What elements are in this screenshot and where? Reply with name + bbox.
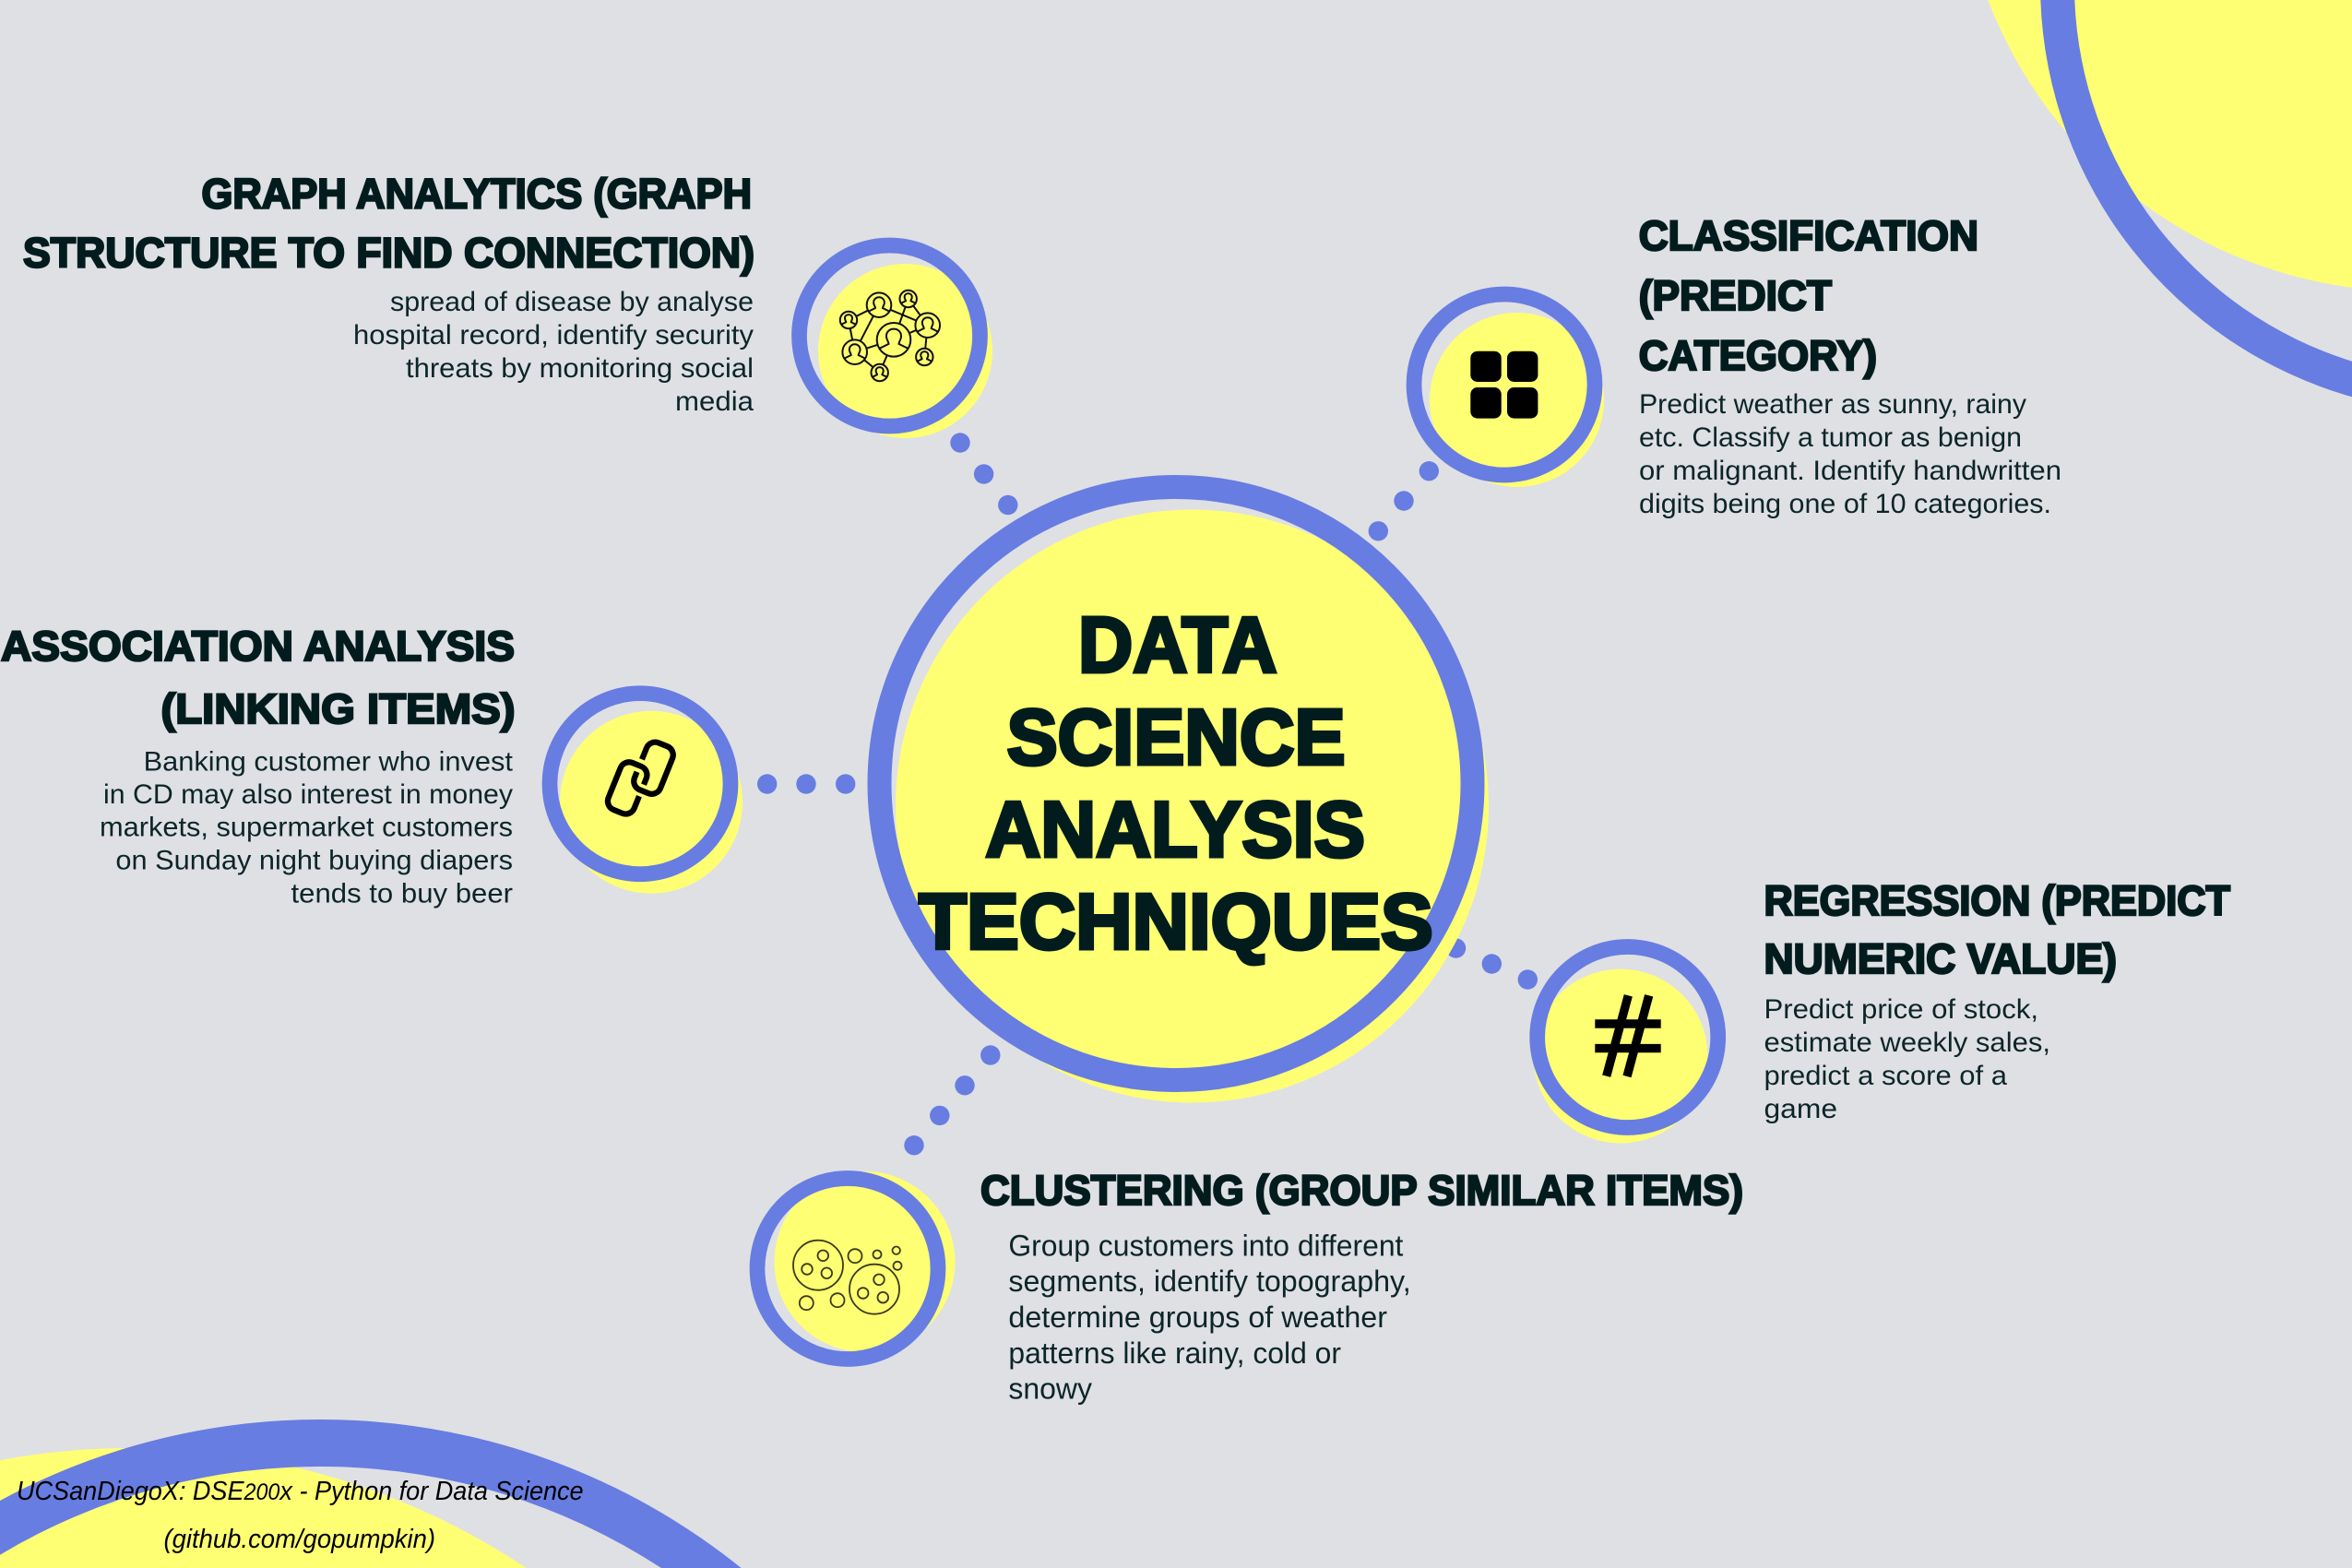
footer credit: (github.com/gopumpkin) bbox=[164, 1525, 435, 1554]
text: graph analytics description: media bbox=[675, 386, 754, 417]
heading: classification: CLASSIFICATION bbox=[1639, 212, 1978, 259]
text: association analysis description: tends to buy beer bbox=[291, 878, 513, 909]
heading: regression: NUMERIC VALUE) bbox=[1764, 935, 2117, 982]
node: regression bbox=[1534, 946, 1718, 1143]
connector dots: clustering bbox=[904, 1045, 1001, 1155]
text: association analysis description: Banking customer who invest bbox=[144, 747, 514, 778]
node: association analysis bbox=[550, 694, 742, 894]
heading: association analysis bbox=[1, 623, 515, 732]
text: regression description: Predict price of stock, bbox=[1764, 994, 2038, 1025]
connector dots: regression bbox=[1446, 938, 1538, 990]
heading: graph analytics bbox=[23, 170, 754, 277]
heading: graph analytics: GRAPH ANALYTICS (GRAPH bbox=[201, 170, 752, 218]
connector dots: association analysis bbox=[757, 774, 855, 794]
node: clustering bbox=[757, 1171, 956, 1360]
heading: association analysis: ASSOCIATION ANALYSIS bbox=[1, 623, 515, 670]
text: classification description: or malignant. Identify handwritten bbox=[1639, 456, 2061, 486]
text: regression description: game bbox=[1764, 1094, 1837, 1124]
text: association analysis description bbox=[100, 747, 514, 909]
heading: clustering: CLUSTERING (GROUP SIMILAR ITEMS) bbox=[980, 1167, 1743, 1214]
text: graph analytics description: hospital record, identify security bbox=[353, 320, 754, 350]
title: DATA bbox=[1078, 601, 1277, 690]
node: classification bbox=[1414, 294, 1604, 487]
icon: clusters of circles bbox=[793, 1241, 902, 1314]
text: clustering description: determine groups of weather bbox=[1008, 1301, 1387, 1334]
connector dots: classification bbox=[1369, 461, 1439, 540]
text: clustering description: Group customers into different bbox=[1008, 1229, 1403, 1263]
text: classification description: digits being one of 10 categories. bbox=[1639, 489, 2051, 519]
node: graph analytics bbox=[799, 245, 992, 438]
icon: hash sign bbox=[1595, 995, 1661, 1076]
footer credit: UCSanDiegoX: DSE200x - Python for Data Science bbox=[17, 1477, 584, 1506]
heading: association analysis: (LINKING ITEMS) bbox=[160, 685, 515, 732]
heading: regression bbox=[1764, 877, 2230, 982]
connector dots: graph analytics bbox=[950, 433, 1018, 515]
heading: regression: REGRESSION (PREDICT bbox=[1764, 877, 2230, 924]
text: clustering description: segments, identify topography, bbox=[1008, 1265, 1411, 1298]
text: regression description: estimate weekly sales, bbox=[1764, 1028, 2050, 1058]
heading: graph analytics: STRUCTURE TO FIND CONNECTION) bbox=[23, 229, 754, 277]
text: association analysis description: in CD may also interest in money bbox=[103, 779, 513, 810]
text: graph analytics description: threats by monitoring social bbox=[406, 353, 754, 384]
central hub circle bbox=[880, 487, 1489, 1103]
icon: four squares grid bbox=[1470, 351, 1538, 419]
decoration: top-right corner circle and arc bbox=[1988, 0, 2352, 397]
text: classification description: Predict weather as sunny, rainy bbox=[1639, 389, 2026, 420]
heading: classification: (PREDICT bbox=[1639, 272, 1832, 319]
text: regression description: predict a score of a bbox=[1764, 1061, 2007, 1091]
text: graph analytics description: spread of disease by analyse bbox=[390, 287, 754, 317]
footer credit bbox=[17, 1477, 584, 1554]
title bbox=[919, 601, 1433, 966]
icon: chain link bbox=[605, 733, 676, 823]
text: association analysis description: markets, supermarket customers bbox=[100, 813, 513, 843]
decoration: bottom-left corner circle and arc bbox=[0, 1420, 742, 1568]
text: clustering description: patterns like rainy, cold or bbox=[1008, 1336, 1341, 1370]
text: clustering description: snowy bbox=[1008, 1372, 1093, 1406]
text: classification description bbox=[1639, 389, 2061, 519]
text: graph analytics description bbox=[353, 287, 754, 417]
text: association analysis description: on Sunday night buying diapers bbox=[115, 846, 513, 876]
heading: classification: CATEGORY) bbox=[1639, 332, 1877, 379]
title: SCIENCE bbox=[1007, 695, 1346, 782]
text: classification description: etc. Classify a tumor as benign bbox=[1639, 422, 2022, 453]
heading: classification bbox=[1639, 212, 1978, 379]
title: ANALYSIS bbox=[985, 786, 1365, 873]
text: regression description bbox=[1764, 994, 2050, 1124]
title: TECHNIQUES bbox=[919, 878, 1433, 966]
text: clustering description bbox=[1008, 1229, 1411, 1406]
icon: network of people bbox=[840, 291, 940, 381]
